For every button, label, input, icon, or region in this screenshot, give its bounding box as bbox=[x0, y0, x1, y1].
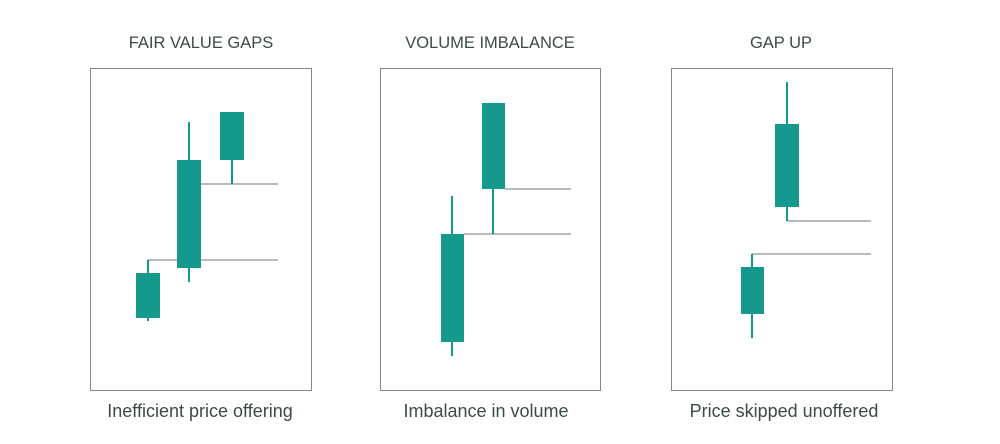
caption: volume imbalance: Imbalance in volume bbox=[403, 401, 569, 421]
caption: fair value gaps: Inefficient price offering bbox=[107, 401, 293, 421]
panel: gap up bbox=[672, 68, 892, 390]
title: gap up: GAP UP bbox=[750, 34, 812, 52]
caption: gap up: Price skipped unoffered bbox=[690, 401, 878, 421]
panel: volume imbalance bbox=[380, 68, 600, 390]
title: volume imbalance: VOLUME IMBALANCE bbox=[405, 34, 575, 52]
title: fair value gaps: FAIR VALUE GAPS bbox=[129, 34, 273, 52]
panel: fair value gaps bbox=[90, 68, 312, 390]
